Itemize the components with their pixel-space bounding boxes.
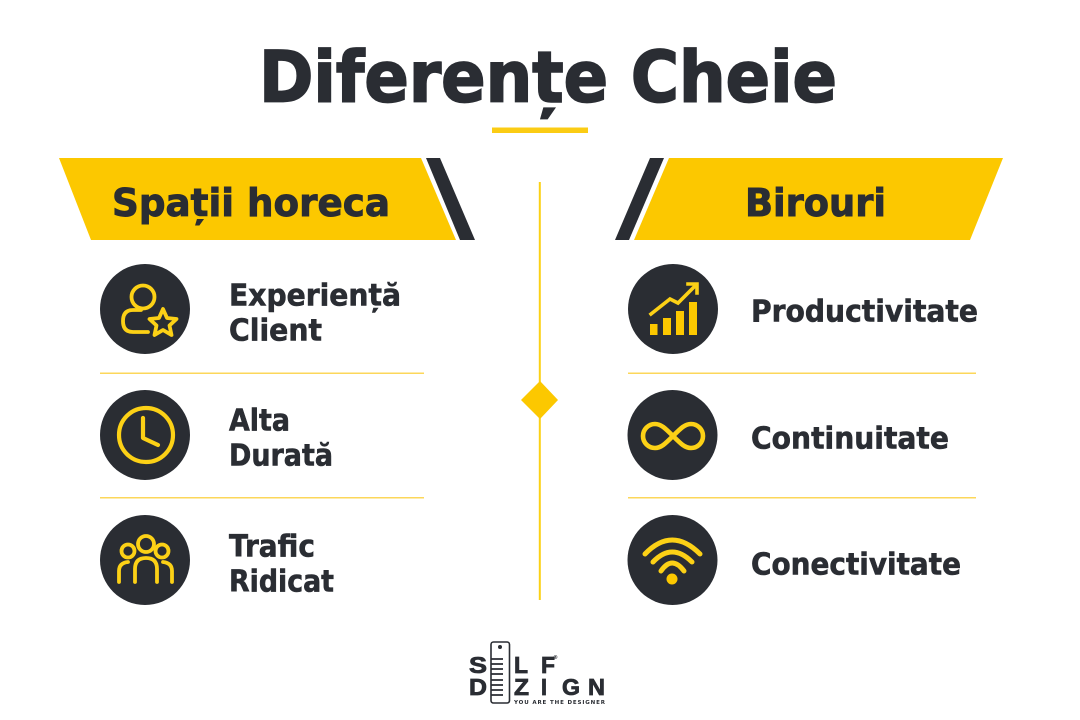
- row: Alta Durată: Alta: [229, 404, 290, 439]
- icon: wifi: [645, 540, 700, 584]
- row: Trafic Ridicat: Trafic: [229, 530, 315, 564]
- title: Diferențe Cheie: [259, 36, 837, 118]
- logo: Self Dezign: F: [541, 652, 555, 678]
- row: Experiență Client: [100, 264, 401, 354]
- row: Conectivitate: [628, 515, 961, 605]
- row: Productivitate: [628, 264, 978, 354]
- icon: growth chart: [650, 284, 697, 335]
- logo: Self Dezign: D: [469, 674, 487, 700]
- logo: Self Dezign: S: [469, 652, 487, 678]
- logo: Self Dezign: ®: [553, 655, 558, 661]
- icon: infinity: [643, 424, 703, 448]
- row: Conectivitate: Conectivitate: [751, 548, 961, 582]
- row: Continuitate: [628, 390, 949, 480]
- banner: Spații horeca: [59, 158, 475, 240]
- row: Trafic Ridicat: Ridicat: [229, 564, 334, 600]
- row: Continuitate: Continuitate: [751, 422, 949, 456]
- icon: group of people: [119, 536, 172, 582]
- icon: clock: [119, 408, 173, 462]
- panel: Birouri: [615, 158, 1003, 605]
- logo: Self Dezign: [469, 642, 606, 706]
- title underline: [492, 128, 588, 133]
- logo: Self Dezign: Z: [514, 674, 529, 700]
- panel: Spații horeca: [59, 158, 475, 605]
- row: Productivitate: Productivitate: [751, 294, 978, 330]
- logo: Self Dezign: L: [514, 652, 528, 678]
- row: Alta Durată: [100, 390, 333, 480]
- center divider with diamond: [521, 182, 558, 600]
- row: Experiență Client: Client: [229, 314, 322, 348]
- row: Alta Durată: Durată: [229, 439, 333, 474]
- row: Experiență Client: Experiență: [229, 278, 401, 314]
- banner: Birouri: [615, 158, 1003, 240]
- icon: client with star: [123, 286, 176, 335]
- logo: Self Dezign: G: [562, 674, 580, 700]
- logo: Self Dezign: I: [541, 674, 547, 700]
- banner: Birouri: Birouri: [745, 181, 886, 225]
- logo: Self Dezign: YOU ARE THE DESIGNER: [513, 700, 606, 706]
- banner: Spații horeca: Spații horeca: [112, 181, 390, 225]
- logo: Self Dezign: N: [588, 674, 605, 700]
- row: Trafic Ridicat: [100, 515, 334, 605]
